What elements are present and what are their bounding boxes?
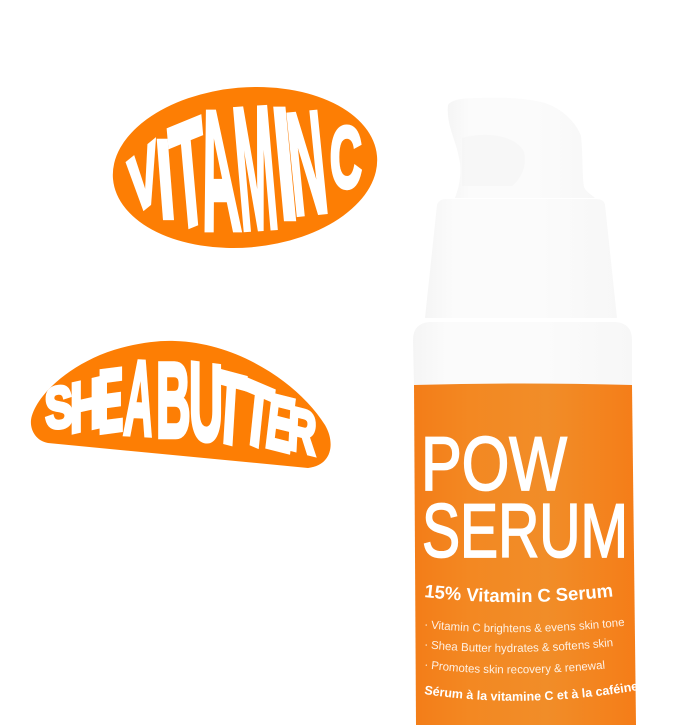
benefit bullets: · Vitamin C brightens & evens skin tone bbox=[426, 620, 624, 634]
badge text: VITAMIN C: I bbox=[152, 117, 179, 243]
pump nozzle bbox=[448, 98, 595, 198]
badge text: SHEA BUTTER: H bbox=[70, 362, 102, 448]
product name: POW SERUM: POW bbox=[421, 422, 567, 507]
shoulder ring bbox=[413, 322, 632, 386]
benefit bullets: · Shea Butter hydrates & softens skin bbox=[426, 638, 613, 654]
badge text: SHEA BUTTER: E bbox=[98, 349, 123, 452]
badge text: SHEA BUTTER: U bbox=[189, 338, 223, 466]
badge text: VITAMIN C bbox=[125, 71, 362, 268]
product: serum pump bottle bbox=[413, 101, 636, 725]
benefit bullets bbox=[426, 620, 624, 675]
badge text: SHEA BUTTER: R bbox=[286, 394, 318, 468]
badge text: SHEA BUTTER: B bbox=[156, 340, 191, 460]
badge text: SHEA BUTTER: E bbox=[262, 378, 299, 469]
product name: POW SERUM bbox=[421, 422, 628, 574]
badge text: VITAMIN C: C bbox=[330, 110, 362, 206]
badge text: SHEA BUTTER bbox=[43, 338, 318, 471]
benefit bullets: · Promotes skin recovery & renewal bbox=[426, 660, 604, 675]
badge text: VITAMIN C: I bbox=[267, 76, 303, 254]
badge text: SHEA BUTTER: A bbox=[122, 339, 157, 459]
badge text: SHEA BUTTER: T bbox=[238, 361, 277, 471]
orange label bbox=[414, 384, 636, 725]
French description: Sérum à la vitamine C et à la caféine bbox=[424, 684, 636, 701]
badge text: VITAMIN C: N bbox=[281, 81, 333, 247]
badge: Shea Butter bbox=[31, 338, 331, 471]
badge text: SHEA BUTTER: S bbox=[43, 373, 75, 442]
pump collar bbox=[425, 199, 617, 318]
product name: POW SERUM: SERUM bbox=[422, 489, 628, 574]
badge text: VITAMIN C: M bbox=[228, 71, 283, 268]
badge: Vitamin C bbox=[106, 71, 384, 268]
badge text: VITAMIN C: T bbox=[164, 85, 213, 263]
badge text: SHEA BUTTER: T bbox=[212, 348, 248, 468]
badge shape: orange half dome bbox=[31, 341, 331, 468]
nozzle inner shadow bbox=[462, 135, 525, 186]
subtitle: 15% Vitamin C Serum bbox=[425, 584, 612, 602]
badge text: VITAMIN C: V bbox=[125, 124, 163, 235]
badge text: VITAMIN C: A bbox=[188, 77, 246, 268]
badge shape: orange ellipse bbox=[106, 76, 384, 259]
